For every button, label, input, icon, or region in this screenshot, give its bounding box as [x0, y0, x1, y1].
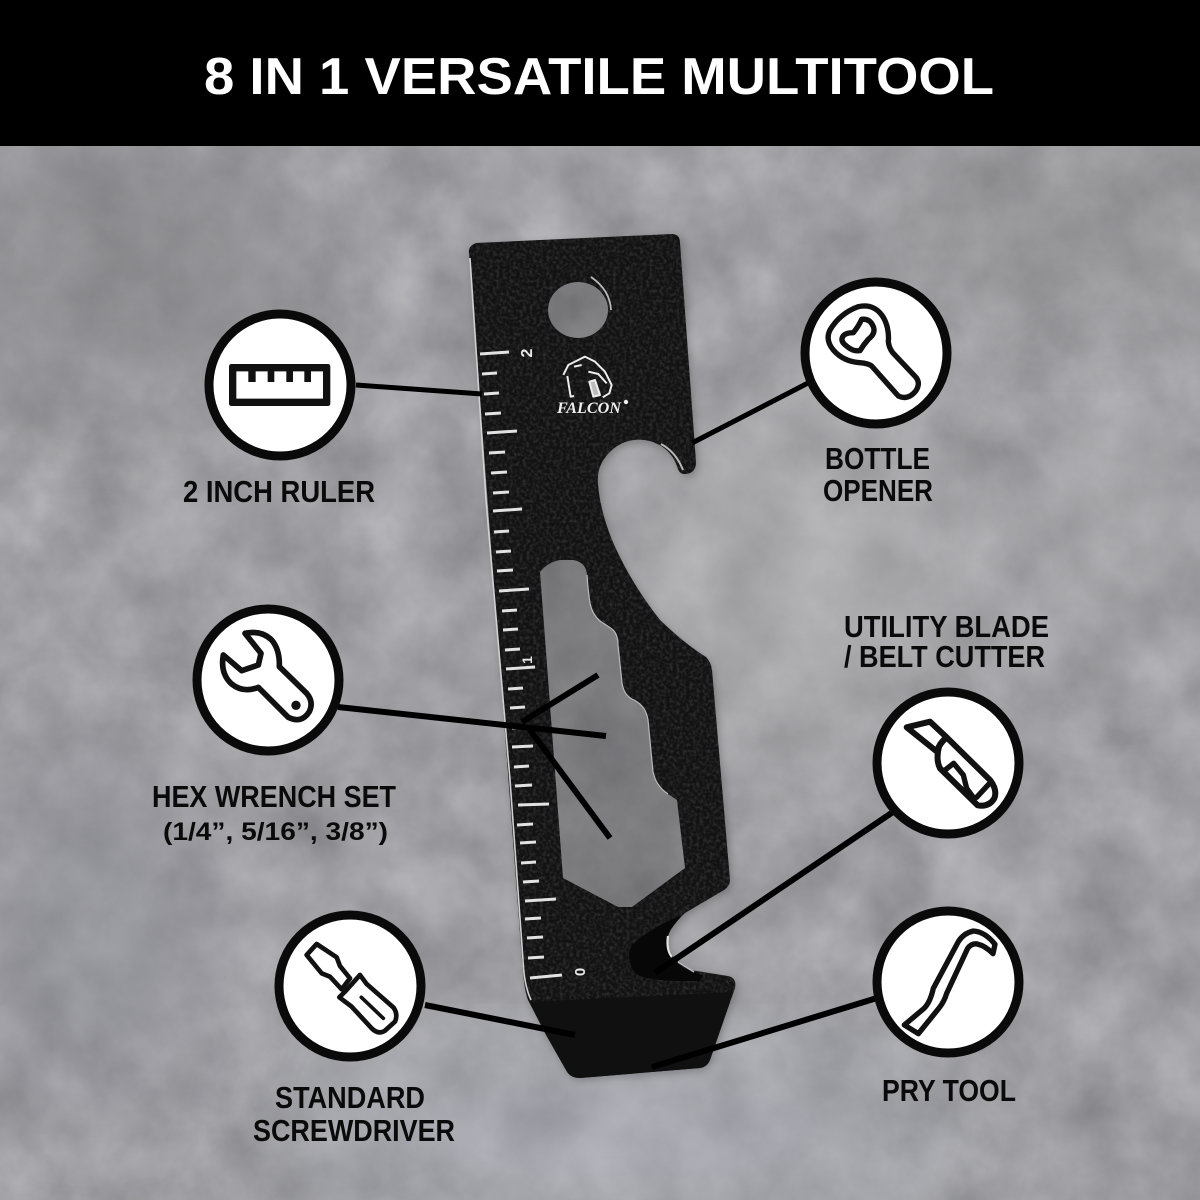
icon: hex wrench [197, 609, 339, 751]
edge highlights [470, 258, 683, 1000]
ruler numerals: 2 [519, 348, 536, 357]
line: hex wrench upper [522, 675, 598, 722]
screwdriver bevel shading [530, 992, 733, 1078]
label: standard screwdriver: SCREWDRIVER [253, 1113, 455, 1148]
connector lines [338, 383, 893, 1067]
label: hex wrench set: HEX WRENCH SET [152, 779, 396, 814]
label: standard screwdriver: STANDARD [275, 1080, 425, 1115]
tool body [469, 234, 735, 1078]
title: 8 IN 1 VERSATILE MULTITOOL [204, 48, 994, 106]
line: utility blade [655, 812, 893, 973]
ruler numerals: 0 [572, 968, 589, 976]
line: screwdriver [425, 1005, 575, 1035]
title banner [0, 0, 1200, 146]
Falcon logo [556, 357, 628, 417]
icon: pry tool [877, 911, 1019, 1053]
icon: bottle opener [805, 282, 947, 424]
label: pry tool: PRY TOOL [882, 1073, 1016, 1108]
line: hex wrench centre [338, 707, 606, 736]
label: 2 inch ruler: 2 INCH RULER [183, 474, 375, 509]
line: pry tool [652, 998, 877, 1067]
line: bottle opener [692, 383, 808, 443]
line: ruler [356, 385, 482, 394]
label: hex wrench set [152, 779, 396, 846]
label: hex wrench set: (1/4”, 5/16”, 3/8”) [163, 818, 388, 846]
icon: ruler [209, 314, 351, 456]
blade notch shading [629, 915, 703, 981]
label: bottle opener: OPENER [823, 473, 933, 508]
label: bottle opener: BOTTLE [825, 441, 930, 476]
ruler numerals: 1 [519, 656, 535, 664]
label: utility blade / belt cutter: / BELT CUTTER [844, 639, 1045, 674]
label: utility blade / belt cutter [844, 609, 1049, 674]
ruler scale [480, 352, 562, 978]
label: utility blade / belt cutter: UTILITY BLADE [844, 609, 1049, 644]
multitool product photo [469, 234, 737, 1081]
line: hex wrench lower [530, 730, 610, 838]
Falcon logo: FALCON [556, 400, 622, 417]
label: standard screwdriver [253, 1080, 455, 1148]
ruler numerals [519, 348, 589, 976]
icon: utility blade [877, 692, 1019, 834]
icon: standard screwdriver [279, 915, 421, 1057]
label: bottle opener [823, 441, 933, 508]
